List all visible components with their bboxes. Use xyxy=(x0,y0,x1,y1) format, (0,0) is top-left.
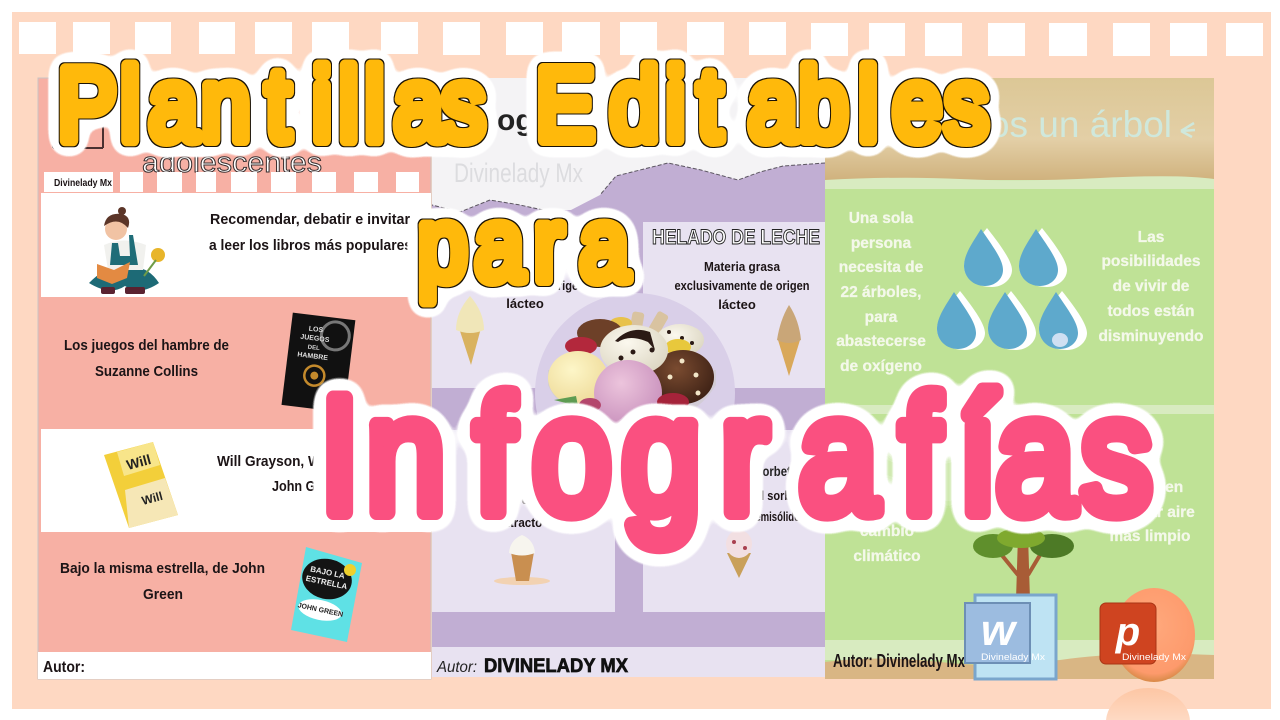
card: helado de crema: Mínimo 18 % xyxy=(490,258,575,273)
text block: right: posibilidades xyxy=(1101,253,1201,270)
footer: Autor: xyxy=(436,659,477,676)
footer: Autor: Divinelady Mx xyxy=(833,651,965,671)
row 4: Bajo la misma estrella xyxy=(60,547,362,642)
text block: lower right xyxy=(1105,479,1195,545)
watermark: Divinelady Mx xyxy=(454,158,583,188)
paper header xyxy=(825,78,1214,180)
text block: left: 22 árboles, xyxy=(840,284,922,301)
strip of small squares xyxy=(44,172,419,192)
card: helado de fruta: Fruta o xyxy=(487,492,529,507)
icon: cup cone xyxy=(494,535,550,585)
book cover xyxy=(104,442,178,528)
title: para: para xyxy=(418,188,629,303)
icon: girl reading xyxy=(89,207,165,294)
card: helado de fruta xyxy=(432,430,615,612)
row 3: Will Grayson xyxy=(41,429,431,532)
illustration: ice cream scoops xyxy=(548,310,716,426)
text block: right: todos están xyxy=(1108,303,1194,320)
book cover: Will xyxy=(125,451,153,473)
icon: cone xyxy=(456,296,484,365)
icon: Word xyxy=(965,595,1056,679)
panel heading fragment: og xyxy=(497,104,534,137)
footer xyxy=(432,647,825,677)
text block: right: de vivir de xyxy=(1113,278,1190,295)
card: helado de crema: lácteo xyxy=(506,296,544,311)
icon: cone xyxy=(777,305,801,376)
panel heading: Salvemos un árbol xyxy=(866,104,1172,145)
text: Will Grayson, Will Grayson, de xyxy=(217,453,415,470)
icon: reflection under PowerPoint xyxy=(1106,688,1190,720)
book cover xyxy=(291,547,362,642)
title: Infografías: Infografías xyxy=(320,363,1152,547)
icon: Word: w xyxy=(981,606,1018,655)
icon: PowerPoint: p xyxy=(1115,610,1140,654)
text block: left: para xyxy=(865,309,898,326)
row 2: Hunger Games xyxy=(64,313,355,413)
footer: Autor: xyxy=(43,659,85,676)
row 1: intro: a leer los libros más populares xyxy=(209,237,412,254)
card: helado de leche: HELADO DE LECHE xyxy=(652,226,820,249)
watermark label: Divinelady Mx xyxy=(54,178,112,189)
card: helado de crema xyxy=(432,222,615,388)
footer xyxy=(825,640,1214,679)
text block: lower left xyxy=(853,523,921,565)
card: helado de leche xyxy=(643,222,825,388)
book cover: LOS xyxy=(308,326,324,334)
book cover xyxy=(282,313,355,413)
book cover: HAMBRE xyxy=(297,351,329,362)
text block: left: abastecerse xyxy=(836,333,926,350)
text block: lower right: respirar aire xyxy=(1105,504,1195,521)
text block: lower left: cambio xyxy=(860,523,914,540)
light stripes xyxy=(825,176,1214,189)
card: sorbete xyxy=(643,430,825,612)
text block: left: necesita de xyxy=(839,259,924,276)
icon: cone xyxy=(726,530,752,578)
icon: PowerPoint: Divinelady Mx xyxy=(1122,652,1186,663)
icon: Word: Divinelady Mx xyxy=(981,652,1045,663)
title: Plantillas Editables: Plantillas Editables xyxy=(58,48,989,163)
card: sorbete: el sorbete xyxy=(755,488,807,503)
text: Recomendar, debatir e invitar xyxy=(210,211,410,228)
torn paper header xyxy=(432,78,825,212)
text block: right xyxy=(1098,229,1204,345)
row 2: Hunger Games: Suzanne Collins xyxy=(95,363,198,380)
icon: open book xyxy=(53,126,103,148)
text block: lower right: Permiten xyxy=(1117,479,1183,496)
text block: left: de oxígeno xyxy=(840,358,922,375)
card: helado de crema: Materia grasa de origen xyxy=(460,278,585,293)
text block: left: Una sola xyxy=(849,210,914,227)
row 3: Will Grayson: John Green xyxy=(272,478,342,495)
card: helado de leche: exclusivamente de origen xyxy=(674,278,810,293)
panel heading: adolescentes xyxy=(142,147,322,179)
footer xyxy=(38,652,431,679)
card: helado de fruta: extracto de xyxy=(497,515,559,530)
film strip squares xyxy=(19,22,1263,56)
torn paper edge xyxy=(432,163,825,212)
panel: ice cream infographic xyxy=(432,78,825,677)
book cover: Will xyxy=(140,489,164,508)
card: sorbete: semisólido xyxy=(750,509,800,524)
book cover: JUEGOS xyxy=(300,334,330,344)
book cover: JOHN GREEN xyxy=(297,602,344,619)
center circle xyxy=(535,293,735,493)
card: helado de leche: Materia grasa xyxy=(704,259,781,274)
icons: water drops xyxy=(937,228,1087,350)
panel: book recommendations infographic xyxy=(38,78,431,679)
illustration: tree xyxy=(973,528,1074,600)
row 4: Bajo la misma estrella: Green xyxy=(143,586,183,603)
panel: tree infographic xyxy=(825,78,1214,679)
row 4: Bajo la misma estrella: Bajo la misma estrella, de John xyxy=(60,560,265,577)
row 1: intro xyxy=(41,193,431,297)
text block: lower left: climático xyxy=(853,548,921,565)
footer: DIVINELADY MX xyxy=(484,656,628,677)
text block: right: Las xyxy=(1138,229,1164,246)
icon: PowerPoint xyxy=(1100,588,1195,682)
text block: left xyxy=(836,210,926,375)
text block: right: disminuyendo xyxy=(1098,328,1204,345)
card: helado de leche: lácteo xyxy=(718,297,756,312)
book cover: BAJO LA xyxy=(309,565,346,581)
icon: leaf xyxy=(1181,123,1195,137)
card: sorbete: Sorbete xyxy=(755,463,797,479)
text block: lower right: más limpio xyxy=(1110,528,1190,545)
book cover: DEL xyxy=(307,345,320,352)
row 2: Hunger Games: Los juegos del hambre de xyxy=(64,337,229,354)
text block: left: persona xyxy=(851,235,912,252)
book cover: ESTRELLA xyxy=(305,574,348,591)
